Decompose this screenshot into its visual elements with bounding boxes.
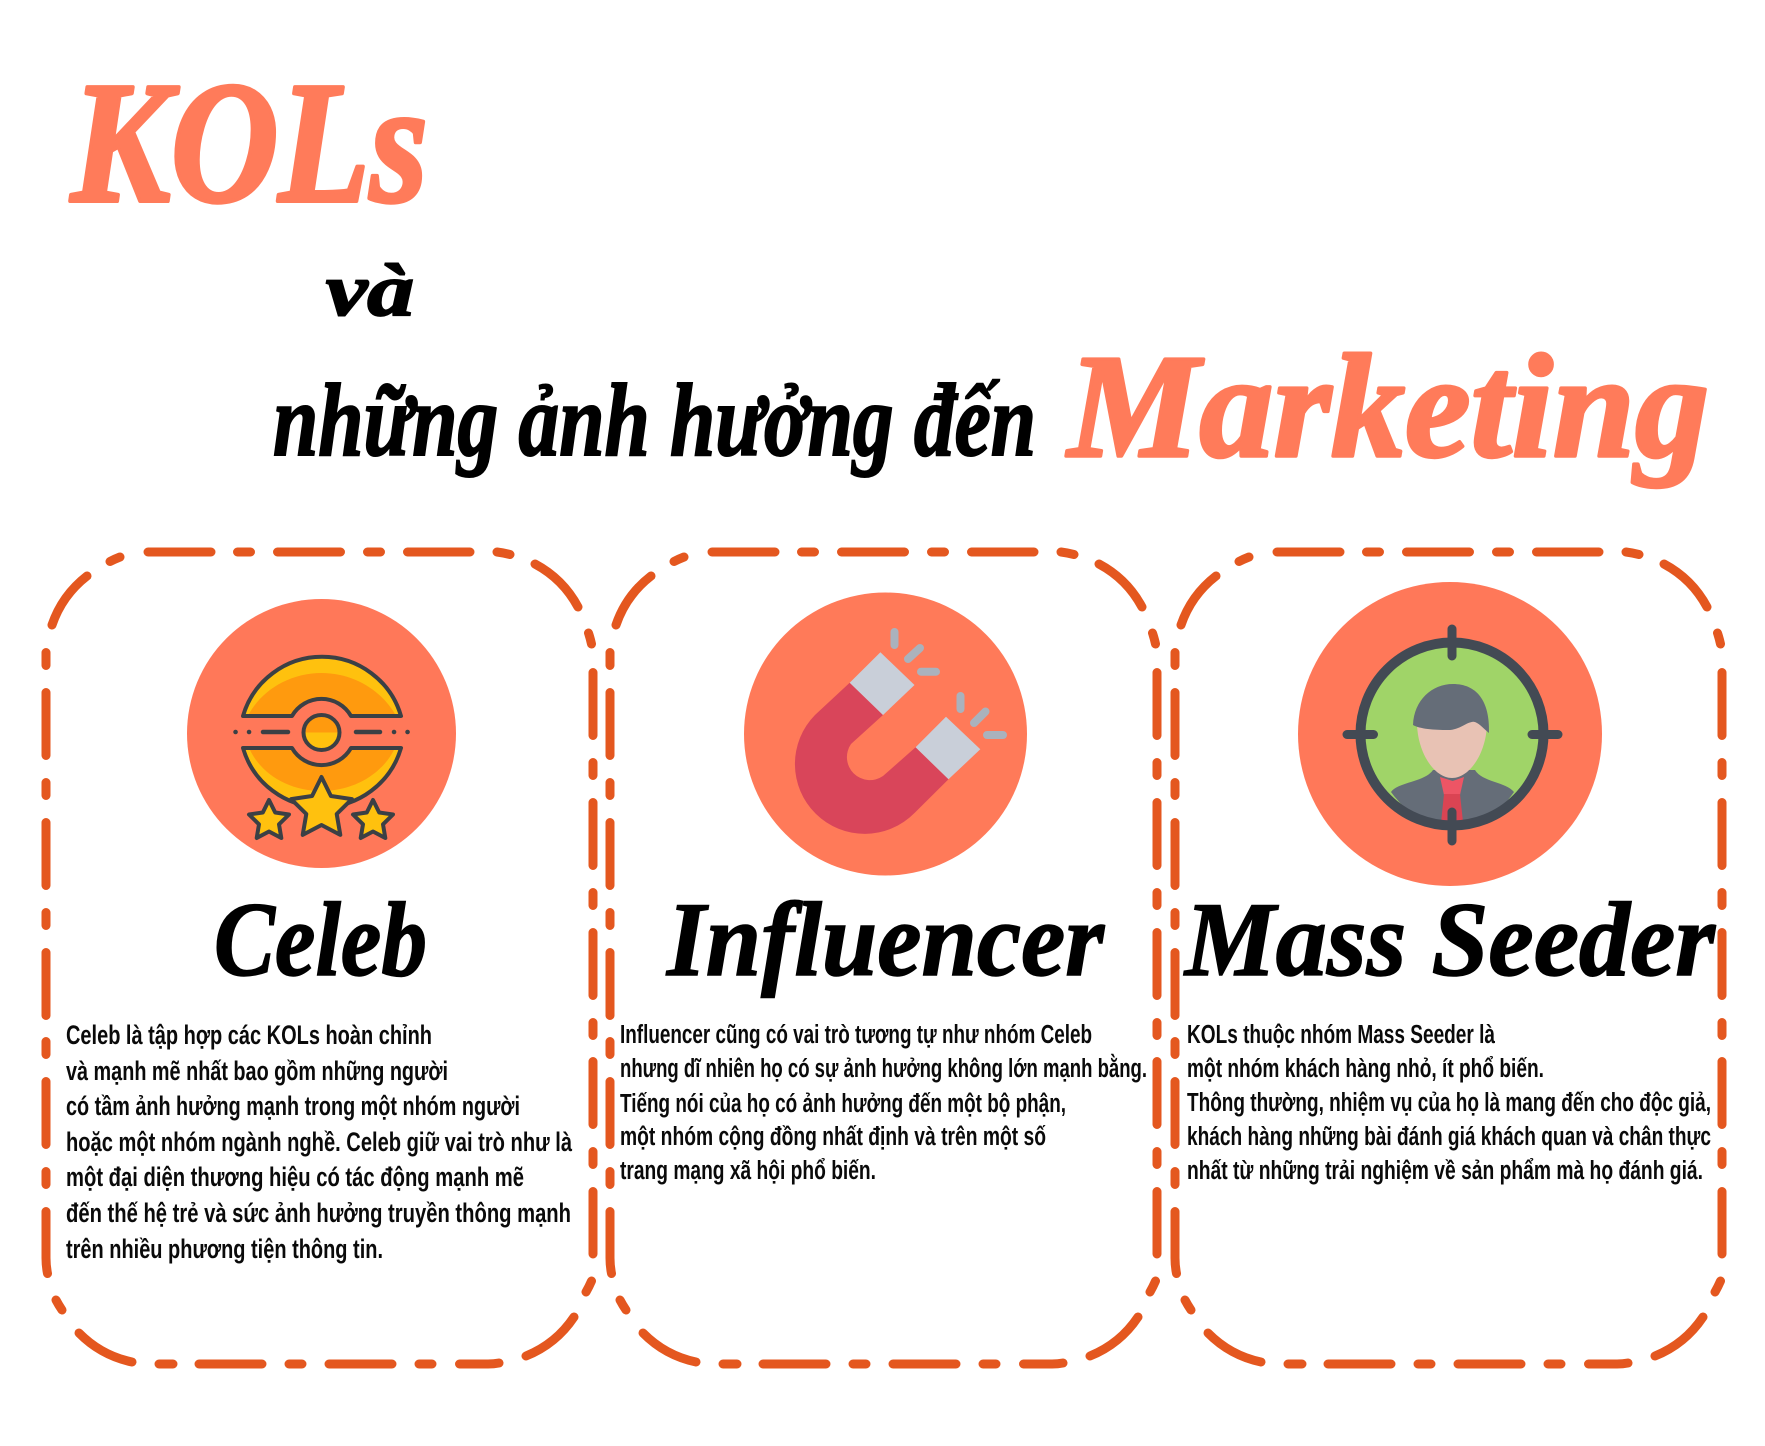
dashed border: Celeb: [46, 552, 593, 1364]
text block: Celeb description: trên nhiều phương tiện thông tin.: [66, 1234, 383, 1264]
dashed border: Influencer: [610, 552, 1157, 1364]
icon: horseshoe magnet: [795, 632, 1003, 834]
text block: Influencer description: trang mạng xã hội phổ biến.: [620, 1157, 876, 1185]
text block: Celeb description: đến thế hệ trẻ và sức ảnh hưởng truyền thông mạnh: [66, 1198, 571, 1228]
text block: Mass Seeder description: một nhóm khách hàng nhỏ, ít phổ biến.: [1187, 1055, 1544, 1083]
text block: Influencer description: Tiếng nói của họ có ảnh hưởng đến một bộ phận,: [620, 1090, 1066, 1118]
panel: Celeb: [46, 552, 593, 1364]
title: [69, 46, 1709, 489]
text block: Influencer description: Influencer cũng có vai trò tương tự như nhóm Celeb: [620, 1021, 1092, 1049]
dashed border: Mass Seeder: [1175, 552, 1722, 1364]
icon: target person: [1347, 629, 1558, 841]
heading: Influencer: Influencer: [665, 881, 1106, 998]
text block: Influencer description: một nhóm cộng đồng nhất định và trên một số: [620, 1123, 1046, 1151]
text block: Celeb description: hoặc một nhóm ngành nghề. Celeb giữ vai trò như là: [66, 1127, 573, 1157]
icon: badge with stars: [236, 657, 408, 838]
text block: Celeb description: Celeb là tập hợp các KOLs hoàn chỉnh: [66, 1020, 432, 1050]
title word: KOLs: KOLs: [69, 46, 428, 239]
text block: Mass Seeder description: [1187, 1021, 1711, 1185]
icon: circle background: [1298, 582, 1602, 886]
text block: Celeb description: và mạnh mẽ nhất bao gồm những người: [66, 1056, 448, 1086]
title line: những ảnh hưởng đến: những ảnh hưởng đến: [273, 363, 1036, 478]
text block: Celeb description: một đại diện thương hiệu có tác động mạnh mẽ: [66, 1162, 524, 1192]
heading: Celeb: Celeb: [214, 881, 427, 998]
panel: Mass Seeder: [1175, 552, 1722, 1364]
title word: và: và: [326, 250, 414, 332]
text block: Influencer description: nhưng dĩ nhiên họ có sự ảnh hưởng không lớn mạnh bằng.: [620, 1053, 1147, 1083]
heading: Mass Seeder: Mass Seeder: [1183, 881, 1717, 998]
text block: Celeb description: [66, 1020, 573, 1264]
icon: circle background: [187, 599, 456, 868]
text block: Mass Seeder description: KOLs thuộc nhóm Mass Seeder là: [1187, 1021, 1496, 1049]
text block: Influencer description: [620, 1021, 1147, 1185]
title word: Marketing: Marketing: [1066, 325, 1709, 489]
icon: circle background: [744, 592, 1027, 876]
text block: Celeb description: có tầm ảnh hưởng mạnh trong một nhóm người: [66, 1091, 520, 1121]
panel: Influencer: [610, 552, 1157, 1364]
